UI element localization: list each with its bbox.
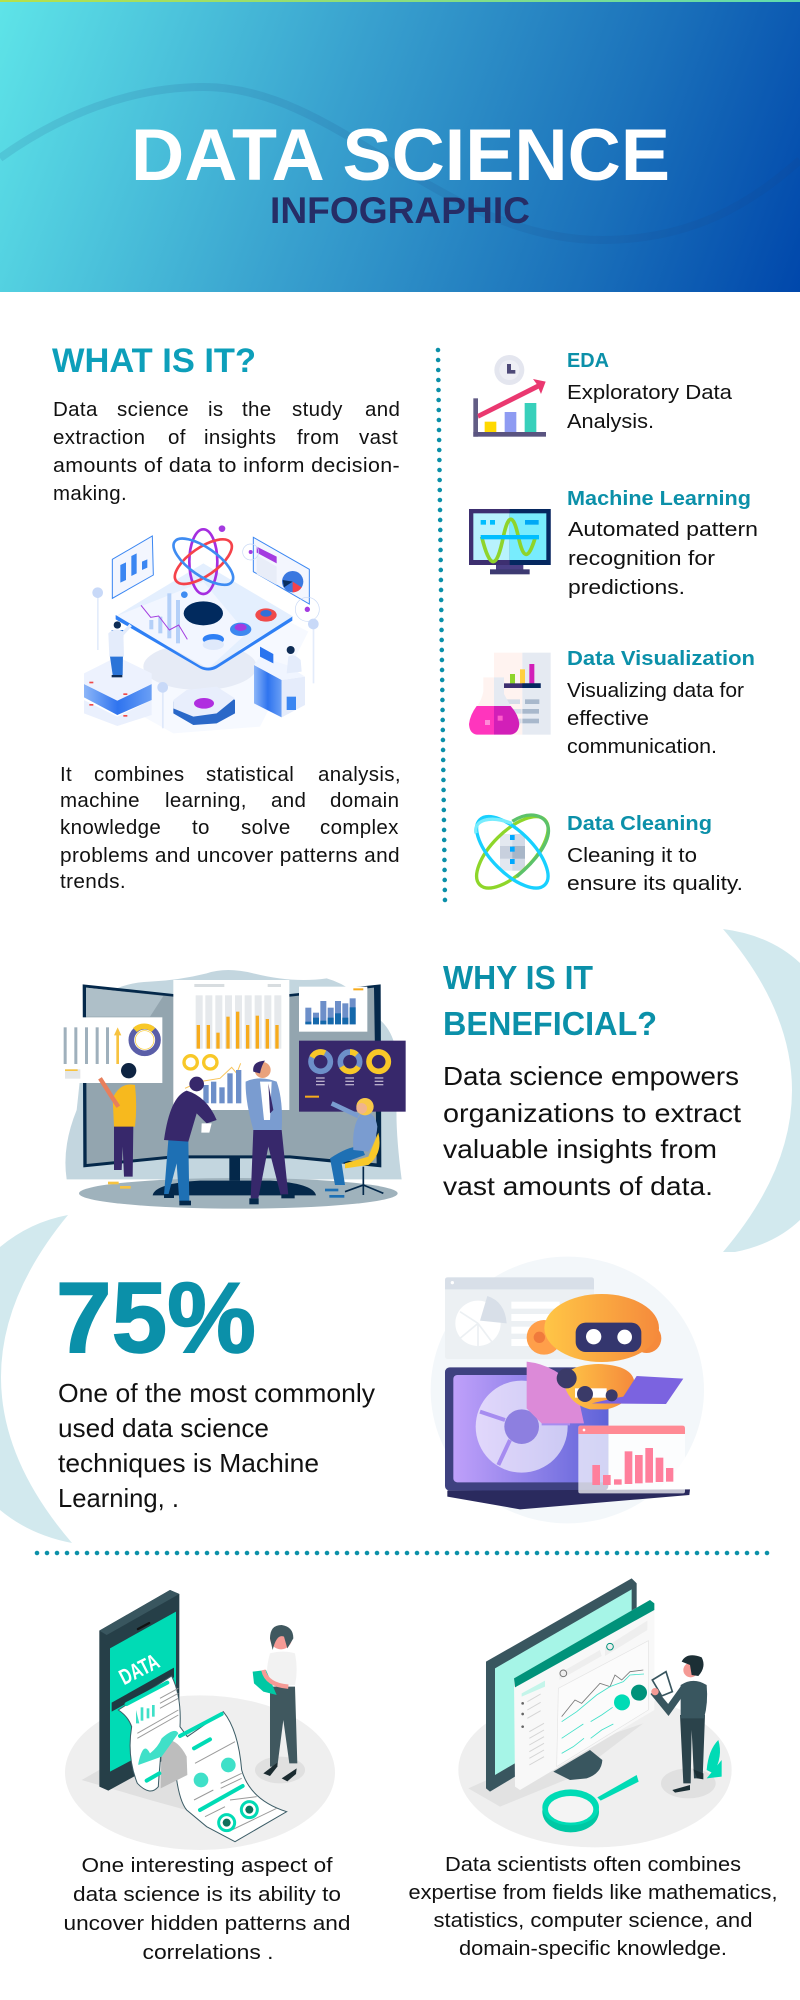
caption: hidden patterns: uncover hidden patterns and xyxy=(64,1912,350,1935)
text: why is it beneficial: valuable insights from xyxy=(443,1134,717,1164)
item: data visualization xyxy=(469,648,755,758)
subtitle: INFOGRAPHIC xyxy=(270,190,530,231)
caption: hidden patterns: correlations . xyxy=(142,1941,274,1964)
text: machine learning: recognition for xyxy=(568,547,715,570)
text: what is it detail: combines xyxy=(94,763,185,786)
illustration: scientist at monitor xyxy=(458,1578,732,1847)
illustration: isometric data platform xyxy=(84,525,319,733)
text: what is it detail: problems and uncover patterns and xyxy=(60,844,400,867)
icon: monitor xyxy=(469,509,551,574)
text: what is it intro xyxy=(53,398,400,505)
text: what is it detail: learning, xyxy=(165,789,247,812)
caption: expertise: statistics, computer science, and xyxy=(434,1909,752,1932)
text: machine learning xyxy=(568,518,758,599)
caption: hidden patterns: One interesting aspect of xyxy=(82,1854,333,1877)
text: what is it intro: science xyxy=(117,398,189,421)
text: data visualization: Visualizing data for xyxy=(567,679,744,702)
text: what is it intro: insights xyxy=(204,426,276,449)
text: data cleaning: ensure its quality. xyxy=(567,872,743,895)
text: what is it intro: extraction xyxy=(53,426,145,449)
text: what is it intro: study xyxy=(292,398,343,421)
caption: hidden patterns: data science is its ability to xyxy=(73,1883,341,1906)
item: EDA xyxy=(473,350,733,437)
illustration: robot with laptop xyxy=(431,1257,704,1523)
icon: flask and report xyxy=(469,653,551,735)
text: what is it detail: trends. xyxy=(60,870,126,893)
dotted vertical separator xyxy=(438,350,445,903)
text: machine learning: Automated pattern xyxy=(568,518,758,541)
text: what is it intro: of xyxy=(168,426,186,449)
text: what is it intro: amounts of data to inform decision- xyxy=(53,454,400,477)
heading: why is it beneficial: WHY IS IT xyxy=(443,959,593,996)
heading: why is it beneficial: BENEFICIAL? xyxy=(443,1005,657,1042)
dotted horizontal separator xyxy=(37,1551,770,1555)
text: what is it intro: the xyxy=(242,398,272,421)
heading: data visualization: Data Visualization xyxy=(567,648,755,670)
title: DATA SCIENCE xyxy=(131,115,670,196)
caption: expertise: expertise from fields like mathematics, xyxy=(408,1881,778,1904)
icon: atom xyxy=(465,805,559,899)
text: what is it detail: complex xyxy=(320,816,399,839)
text: data cleaning: Cleaning it to xyxy=(567,844,697,867)
text: what is it detail: and xyxy=(271,789,306,812)
text: data visualization: communication. xyxy=(567,735,717,758)
text: what is it detail: analysis, xyxy=(318,763,401,786)
caption: expertise: domain-specific knowledge. xyxy=(459,1937,727,1960)
caption: expertise xyxy=(408,1853,778,1960)
text: statistic description: techniques is Machine xyxy=(58,1448,319,1478)
text: machine learning: predictions. xyxy=(568,576,685,599)
text: what is it detail: statistical xyxy=(206,763,294,786)
illustration: phone printing data xyxy=(65,1590,335,1850)
text: what is it detail: It xyxy=(60,763,72,786)
text: why is it beneficial: organizations to extract xyxy=(443,1098,742,1128)
item: data cleaning xyxy=(465,805,743,899)
heading: EDA: EDA xyxy=(567,350,609,372)
heading: what is it: WHAT IS IT? xyxy=(52,342,256,380)
heading: data cleaning: Data Cleaning xyxy=(567,813,712,835)
statistic: 75%: 75% xyxy=(56,1262,256,1374)
text: statistic description: Learning, . xyxy=(58,1483,179,1513)
item: machine learning xyxy=(469,488,758,599)
illustration: analysts at dashboard xyxy=(58,970,406,1209)
text: why is it beneficial: vast amounts of data. xyxy=(443,1171,713,1201)
text: what is it intro: Data xyxy=(53,398,98,421)
crescent right xyxy=(723,929,800,1252)
text: why is it beneficial xyxy=(443,1061,742,1201)
heading: why is it beneficial xyxy=(443,959,657,1042)
illustration: phone printing data: DATA xyxy=(115,1649,163,1690)
text: why is it beneficial: Data science empowers xyxy=(443,1061,739,1091)
caption: expertise: Data scientists often combines xyxy=(445,1853,741,1876)
text: what is it detail: domain xyxy=(330,789,399,812)
text: data visualization: effective xyxy=(567,707,649,730)
header banner xyxy=(0,0,800,292)
text: statistic description: used data science xyxy=(58,1413,269,1443)
crescent left xyxy=(0,1215,72,1543)
text: EDA: Analysis. xyxy=(567,410,654,433)
text: what is it detail xyxy=(60,763,401,893)
text: statistic description xyxy=(58,1378,375,1513)
caption: hidden patterns xyxy=(64,1854,350,1964)
text: what is it intro: vast xyxy=(359,426,398,449)
text: what is it intro: is xyxy=(208,398,224,421)
heading: machine learning: Machine Learning xyxy=(567,488,751,510)
text: EDA: Exploratory Data xyxy=(567,381,733,404)
text: what is it detail: knowledge xyxy=(60,816,161,839)
text: what is it intro: from xyxy=(297,426,339,449)
text: what is it detail: to xyxy=(192,816,210,839)
text: what is it intro: making. xyxy=(53,482,127,505)
icon: EDA chart xyxy=(473,355,546,437)
text: what is it detail: machine xyxy=(60,789,140,812)
text: what is it intro: and xyxy=(365,398,400,421)
text: data cleaning xyxy=(567,844,743,895)
text: what is it detail: solve xyxy=(241,816,291,839)
text: data visualization xyxy=(567,679,744,758)
text: EDA xyxy=(567,381,733,433)
text: statistic description: One of the most commonly xyxy=(58,1378,375,1408)
